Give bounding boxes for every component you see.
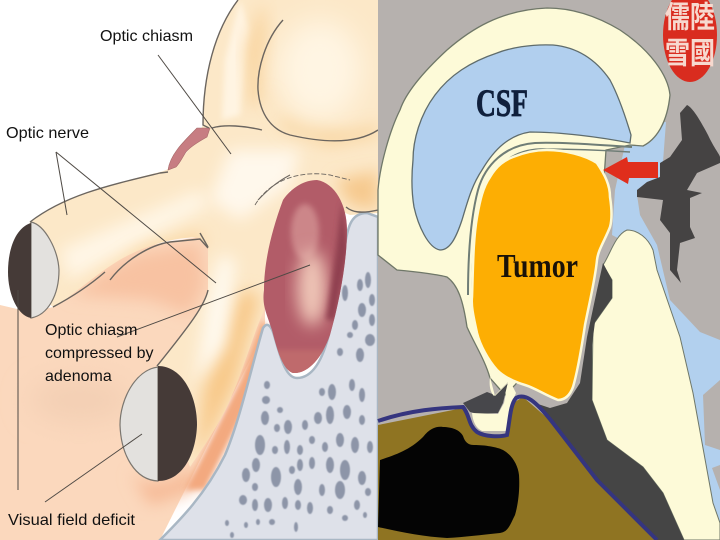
label: optic chiasm compressed by adenoma: Optic chiasm [45, 322, 137, 339]
nerve cross-section: lower [120, 366, 197, 481]
cream optic nerves and chiasm [8, 0, 378, 467]
sphenoid sinus [378, 427, 519, 538]
tumor [472, 150, 612, 400]
dark tissue below tumor [535, 263, 684, 540]
sphenoid bone [378, 397, 657, 540]
cream brain tissue [378, 8, 670, 395]
label: Tumor: Tumor [497, 248, 578, 285]
membrane around tumor [468, 143, 632, 295]
pink bump [168, 128, 210, 170]
panel: MRI schematic of tumor [378, 0, 720, 540]
adenoma [263, 180, 348, 380]
peach background tissue [0, 236, 272, 540]
label: optic chiasm compressed by adenoma: adenoma [45, 368, 112, 385]
label: optic chiasm compressed by adenoma: compressed by [45, 345, 154, 362]
dark wedge near stalk [463, 382, 508, 414]
label: CSF: CSF [476, 82, 528, 125]
right CSF strip [612, 122, 720, 540]
bone pores [225, 272, 375, 538]
stalk [472, 377, 516, 431]
label: optic chiasm: Optic chiasm [100, 28, 193, 45]
label: visual field deficit: Visual field deficit [8, 512, 136, 529]
leader lines [18, 55, 310, 502]
red seal [663, 0, 717, 82]
nerve cross-section: left [8, 222, 59, 318]
red seal: 國 [690, 29, 715, 72]
panel: optic chiasm illustration [0, 0, 378, 540]
CSF ventricle [412, 45, 631, 250]
red arrow [603, 157, 658, 184]
dark cistern shape [637, 105, 720, 283]
lower cream tissue [592, 230, 720, 540]
bone: sella [160, 213, 378, 540]
blue dura line [378, 396, 657, 540]
label: optic nerve: Optic nerve [6, 125, 89, 142]
anatomy outlines [30, 0, 378, 366]
red seal: 雪 [665, 29, 690, 72]
